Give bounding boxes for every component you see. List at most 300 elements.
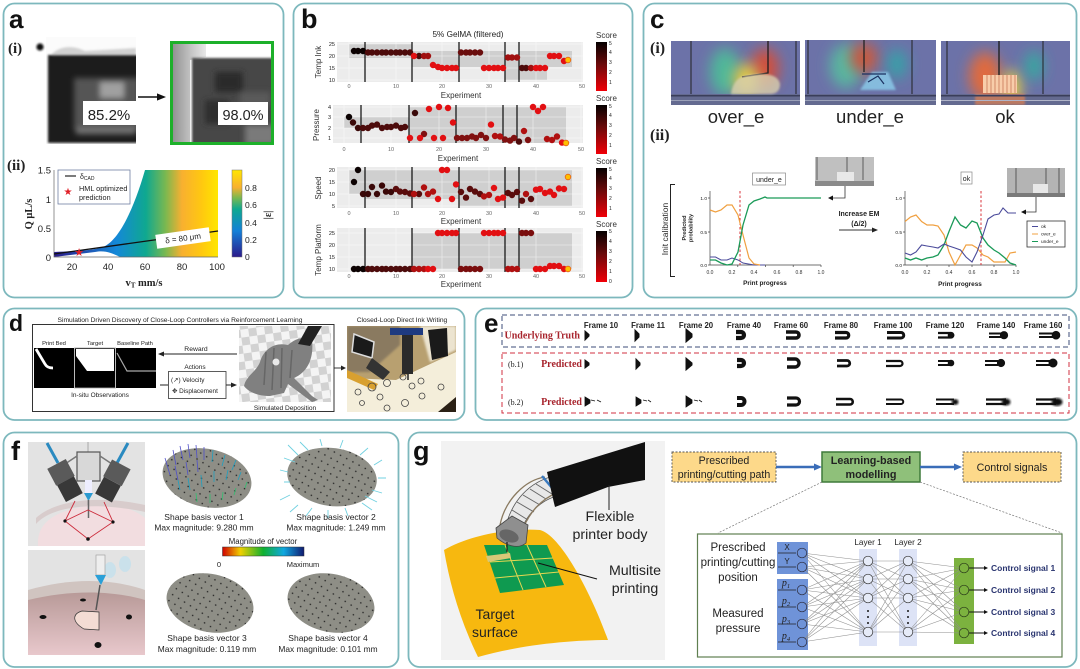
label: flexible printer body: printer body [573,527,648,543]
chart: Temp Platform: 30 [486,274,492,280]
input symbols: p [782,596,787,607]
legend: score colorbars: 1 [609,269,612,275]
box: prescribed path: Prescribed [699,455,749,467]
legend: score colorbars: 4 [609,176,612,182]
mesh: shape basis vector 4: Max magnitude: 0.101 mm [278,644,378,654]
chart: Speed: 30 [486,211,492,217]
chart: Pressure: Pressure [312,108,321,141]
connector [160,384,232,386]
legend: score colorbars: Score [596,94,617,103]
class labels: ok [995,106,1016,127]
frame labels: Frame 10 [584,321,619,330]
printhead [496,516,528,552]
frame labels: Frame 40 [727,321,762,330]
output labels: Control signal 1 [991,563,1056,573]
mesh: shape basis vector 3: Max magnitude: 0.119 mm [158,644,256,654]
heading: g: g [413,436,430,466]
legend: score colorbars: 3 [609,186,612,192]
image: under_e heatmap [805,40,936,105]
input symbols: X [784,543,790,552]
title: closed loop: Closed-Loop Direct Ink Writing [357,317,448,324]
panel: f [4,432,398,667]
layer 1 nodes [863,556,873,637]
image: ok print thumbnail [1007,168,1065,197]
leader: printer body [608,485,610,510]
label: ok: ok [963,176,971,183]
frame labels: Frame 140 [977,321,1016,330]
panel: a [4,4,284,298]
chart: Temp Ink [314,42,585,100]
class labels: over_e [708,106,764,128]
chart: Pressure: 4 [328,105,331,111]
legend: score colorbars: 5 [609,104,612,110]
input symbols: 1 [787,583,790,590]
chart: Speed: 0 [347,211,351,217]
image: under_e print thumbnail [815,157,874,186]
frame labels: Frame 160 [1024,321,1063,330]
box: control signals [963,452,1061,482]
frame labels: Frame 20 [679,321,714,330]
label: multisite printing: printing [612,581,658,597]
line label: δ = 80 μm [165,231,202,245]
arrow [839,229,873,231]
observations: In-situ Observations [71,392,130,399]
bracket [670,184,675,276]
panel: e [476,308,1076,420]
box: prescribed path [672,452,776,482]
image: print after optimization [172,42,276,148]
legend: score colorbars: 2 [609,196,612,202]
mesh: shape basis vector 1 [154,440,257,532]
chart: Temp Ink: 10 [329,78,335,84]
chart: Temp Platform: 10 [329,267,335,273]
ink speck [36,43,44,51]
chart: Speed: 10 [329,192,335,198]
box: control signals: Control signals [977,462,1047,474]
colorbar: magnitude of vector [217,537,319,569]
input symbols: 4 [787,636,791,643]
legend: ★ [64,187,73,198]
label: under_e: under_e [756,177,782,184]
legend: HML optimized [79,184,127,193]
legend: score colorbars: 1 [609,206,612,212]
illustration: flexible printer [441,441,665,660]
legend [1027,221,1065,247]
x axis title: mm/s [135,278,163,289]
legend: score colorbars: Score [596,157,617,166]
shapes: predicted b.2 [585,396,1062,407]
input descriptions: Measured [712,608,764,620]
label: under_e [752,173,786,185]
legend: score colorbars: 4 [609,113,612,119]
label: flexible printer body [573,509,648,543]
colorbar: 0.8 [245,183,257,193]
frame labels: Frame 60 [774,321,809,330]
green patches [484,545,564,593]
frame labels [584,321,1063,330]
label: multisite printing [609,563,661,597]
caption: Shape basis vector 1 [164,512,244,522]
chart: ok probability [895,191,1020,288]
chart: under_e probability [682,191,825,287]
output band [954,558,974,644]
legend: over_e [1041,232,1056,238]
class labels: under_e [836,106,904,128]
legend: score colorbars: 4 [609,239,612,245]
chart: under_e probability: 0.0 [700,263,707,269]
legend: ok [1041,224,1047,230]
caption: Shape basis vector 2 [296,512,376,522]
input bands [777,542,808,574]
chart: Speed [314,167,585,226]
arrow: reward [158,346,237,356]
frame labels: Frame 120 [926,321,965,330]
chart: Speed: 15 [329,180,335,186]
arrow [776,466,817,468]
zoom connector lines [718,482,1062,533]
label: 98.0% [218,102,268,125]
colorbar: 0 [245,252,250,262]
legend: δ [80,174,84,181]
chart: Temp Platform: 15 [329,255,335,261]
label: multisite printing: Multisite [609,563,661,579]
arrow [832,186,845,198]
input symbols: p [782,614,787,625]
chart: Speed: 10 [393,211,399,217]
panel: g [408,432,1076,667]
label: target surface [472,606,518,640]
layer bands [859,549,877,646]
label: Init calibration: Init calibration [660,203,670,255]
row labels: (b.2) [508,398,524,407]
actions box [168,364,226,398]
chart: Temp Platform: Experiment [441,280,482,289]
image: printing on tissue [28,550,145,655]
legend: score colorbars: 3 [609,249,612,255]
chart: Pressure: 30 [483,147,489,153]
chart: Temp Ink: 50 [579,84,585,90]
legend: score colorbars: 3 [609,123,612,129]
label: Increase EM: (Δ/2) [851,221,867,228]
chart: Speed: Speed [314,176,323,200]
chart: ok probability: 0.6 [969,270,976,276]
image: camera rig over tissue [28,442,145,546]
label: (i): (i) [8,41,22,57]
legend: score colorbars [596,31,617,285]
chart: under_e probability: Predicted [682,215,688,241]
x axis ticks: 20 [67,262,77,273]
chart: ok probability: 0.0 [902,270,909,276]
input descriptions: Prescribed [711,542,765,554]
leader: multisite [538,563,597,579]
printer tube [547,442,645,507]
mesh: shape basis vector 4 [278,565,380,654]
arrow [1025,197,1036,212]
chart: Pressure: 10 [388,147,394,153]
colorbar: 0.6 [245,200,257,210]
layer labels [854,538,922,547]
layer 2 nodes [903,556,913,637]
x axis title: v [125,278,131,289]
mesh: shape basis vector 2: Max magnitude: 1.249 mm [286,522,386,532]
dashed box: predicted [502,353,1069,413]
legend: score colorbars: 2 [609,70,612,76]
label: 85.2% [83,101,136,125]
arrow [334,367,342,369]
y axis ticks: 1 [46,195,51,206]
network diagram [698,534,1062,657]
chart: Temp Platform: 0 [347,274,351,280]
chart: Temp Platform [314,224,585,289]
chart: Pressure [312,105,584,163]
chart: Speed: 20 [329,168,335,174]
label: 85.2%: 85.2% [88,107,130,124]
image: simulated deposition: Simulated Deposition [254,405,316,412]
layer labels: Layer 2 [894,538,922,547]
chart: ok probability: 0.5 [895,230,902,236]
frame labels: Frame 100 [874,321,913,330]
y axis ticks: 1.5 [38,166,51,176]
image: ok heatmap [941,41,1070,106]
chart: under_e probability: 1.0 [818,270,825,276]
colorbar: magnitude of vector: Magnitude of vector [229,537,298,546]
mesh: shape basis vector 1: Max magnitude: 9.280 mm [154,522,254,532]
legend: score colorbars: 1 [609,143,612,149]
legend: score colorbars: 4 [609,50,612,56]
chart: under_e probability: 0.0 [707,270,714,276]
chart: Temp Ink: Experiment [441,91,482,100]
row labels [505,330,582,408]
output nodes [959,563,969,638]
chart: Temp Ink: Temp Ink [314,45,323,78]
legend: prediction [79,193,111,202]
legend: score colorbars: 2 [609,259,612,265]
label: (i): (i) [650,40,665,57]
x axis ticks: 80 [177,262,187,273]
input symbols: p [782,631,787,642]
image: closed-loop printer photo [347,326,456,412]
colorbar: magnitude of vector: Maximum [287,560,319,569]
y axis ticks [38,166,51,264]
chart: Pressure: 0 [342,147,346,153]
input descriptions: position [718,572,758,584]
row labels: Predicted [541,397,582,408]
dashed box: underlying truth [502,315,1069,347]
legend: under_e [1041,239,1059,245]
actions box: Actions [184,364,206,371]
arrow: reward: Reward [184,346,208,353]
chart: Temp Platform: 50 [579,274,585,280]
input symbols: Y [784,557,790,566]
label: ok [961,172,972,184]
input descriptions [701,542,775,635]
colorbar [232,170,274,262]
layer labels: Layer 1 [854,538,882,547]
chart: Pressure: 3 [328,115,331,121]
legend: score colorbars: 5 [609,167,612,173]
x axis title: T [131,282,136,290]
input symbols: 3 [786,619,791,626]
arrow [138,96,158,98]
heading: c: c [650,4,664,34]
observations [34,341,156,399]
chart: Temp Ink: 30 [486,84,492,90]
input descriptions: printing/cutting [701,557,775,569]
chart: Temp Ink: 0 [347,84,351,90]
chart: Pressure: 20 [436,147,442,153]
image: print before optimization [46,46,136,144]
x axis ticks [67,262,225,273]
colorbar: |ε| [263,211,274,219]
chart: Temp Platform: 20 [329,243,335,249]
legend: score colorbars: Score [596,220,617,229]
shapes: underlying truth [585,329,1060,342]
chart: Temp Platform: 40 [533,274,539,280]
chart: ok probability: 0.2 [924,270,931,276]
heading: d: d [9,310,23,336]
chart: under_e probability: 0.6 [774,270,781,276]
panel: d [4,308,464,420]
label: Increase EM [839,211,880,228]
frame labels: Frame 80 [824,321,859,330]
label: (ii): (ii) [650,127,670,144]
observations: Target [87,341,103,347]
y axis ticks: 0 [46,253,51,264]
x axis ticks: 40 [103,262,113,273]
input symbols: p [782,578,787,589]
image: over_e heatmap [671,41,800,105]
input symbols [781,543,791,643]
caption: Shape basis vector 3 [167,633,247,643]
actions box: ✥ Displacement [172,388,218,395]
label: 98.0%: 98.0% [222,108,264,124]
connections [802,553,964,642]
x axis ticks: 60 [140,262,150,273]
chart: Temp Platform: 25 [329,231,335,237]
x axis ticks: 100 [209,262,225,273]
chart: under_e probability: 1.0 [700,196,707,202]
chart: Temp Ink: 10 [393,84,399,90]
caption: Shape basis vector 4 [288,633,368,643]
panel: b [294,4,632,298]
shapes: predicted b.1 [585,358,1057,370]
chart: ok probability: 0.8 [991,270,998,276]
framed diagram [32,324,334,412]
legend: score colorbars: 0 [609,279,612,285]
arrow [920,466,957,468]
chart: ok probability: Print progress [938,281,982,288]
chart: Temp Platform: 20 [439,274,445,280]
ellipsis dots [868,610,908,624]
heading: a: a [9,4,24,34]
label: (ii): (ii) [7,158,25,174]
chart: Pressure: 1 [328,136,331,142]
chart: process map [24,166,225,290]
heading: e: e [484,308,498,338]
chart: Speed: Experiment [441,217,482,226]
legend: score colorbars: 1 [609,80,612,86]
observations: Print Bed [42,341,66,347]
colorbar: magnitude of vector: 0 [217,560,221,569]
output labels: Control signal 3 [991,607,1056,617]
actions box: (↗) Velocity [171,377,205,384]
colorbar: 0.2 [245,235,257,245]
legend: score colorbars: 5 [609,229,612,235]
heading: f: f [11,436,21,466]
chart: under_e probability: 0.2 [729,270,736,276]
output arrows [969,568,985,633]
chart: ok probability: 1.0 [1013,270,1020,276]
chart: Pressure: Experiment [438,154,479,163]
mesh: shape basis vector 3 [158,565,259,654]
label: target surface: surface [472,624,518,640]
input nodes [797,548,807,647]
input descriptions: pressure [716,623,760,635]
chart: Speed: 40 [533,211,539,217]
chart: ok probability: 0.4 [946,270,953,276]
label: target surface: Target [476,606,515,622]
chart: under_e probability: Print progress [743,280,787,287]
legend [58,170,130,204]
legend: score colorbars: 5 [609,41,612,47]
chart: Speed: 50 [579,211,585,217]
chart: Temp Platform: 10 [393,274,399,280]
chart: under_e probability: 0.8 [796,270,803,276]
target surface [444,530,608,657]
chart: Temp Ink: 20 [439,84,445,90]
chart: Pressure: 2 [328,126,331,132]
frame labels: Frame 11 [631,321,666,330]
box: prescribed path: printing/cutting path [678,469,770,481]
legend: score colorbars: 2 [609,133,612,139]
legend: score colorbars: Score [596,31,617,40]
chart: under_e probability: 0.5 [700,230,707,236]
chart title: 5% GelMA (filtered) [433,30,504,39]
mesh: shape basis vector 2 [280,439,386,532]
y axis ticks: 0.5 [38,224,51,235]
chart: Pressure: 40 [530,147,536,153]
chart: ok probability: 1.0 [895,196,902,202]
box: learning-based modelling: modelling [846,469,896,481]
panel: c [644,4,1076,298]
chart: Temp Platform: Temp Platform [314,224,323,276]
y axis title: Q μL/s [24,199,35,229]
box: learning-based modelling: Learning-based [831,455,911,467]
image: simulated deposition [239,326,331,412]
star marker: ★ [74,247,84,259]
chart: Temp Ink: 25 [329,42,335,48]
chart: Speed: 20 [439,211,445,217]
spring section [500,476,560,535]
row labels: (b.1) [508,360,524,369]
line label [155,227,211,249]
box: learning-based modelling [822,452,920,482]
row labels: Predicted [541,359,582,370]
chart: Temp Ink: 15 [329,66,335,72]
legend: CAD [84,176,95,182]
chart: Speed: 5 [332,204,335,210]
colorbar: 0.4 [245,218,257,228]
input arrows [778,553,796,642]
row labels: Underlying Truth [505,330,580,342]
chart: Pressure: 50 [578,147,584,153]
output labels [991,563,1056,638]
title: simulation: Simulation Driven Discovery of Close-Loop Controllers via Reinforcement Learning [58,317,303,324]
chart: under_e probability: probability [688,213,694,242]
legend: score colorbars: 3 [609,60,612,66]
label: Increase EM: Increase EM [839,211,880,218]
chart: ok probability: 0.0 [895,263,902,269]
